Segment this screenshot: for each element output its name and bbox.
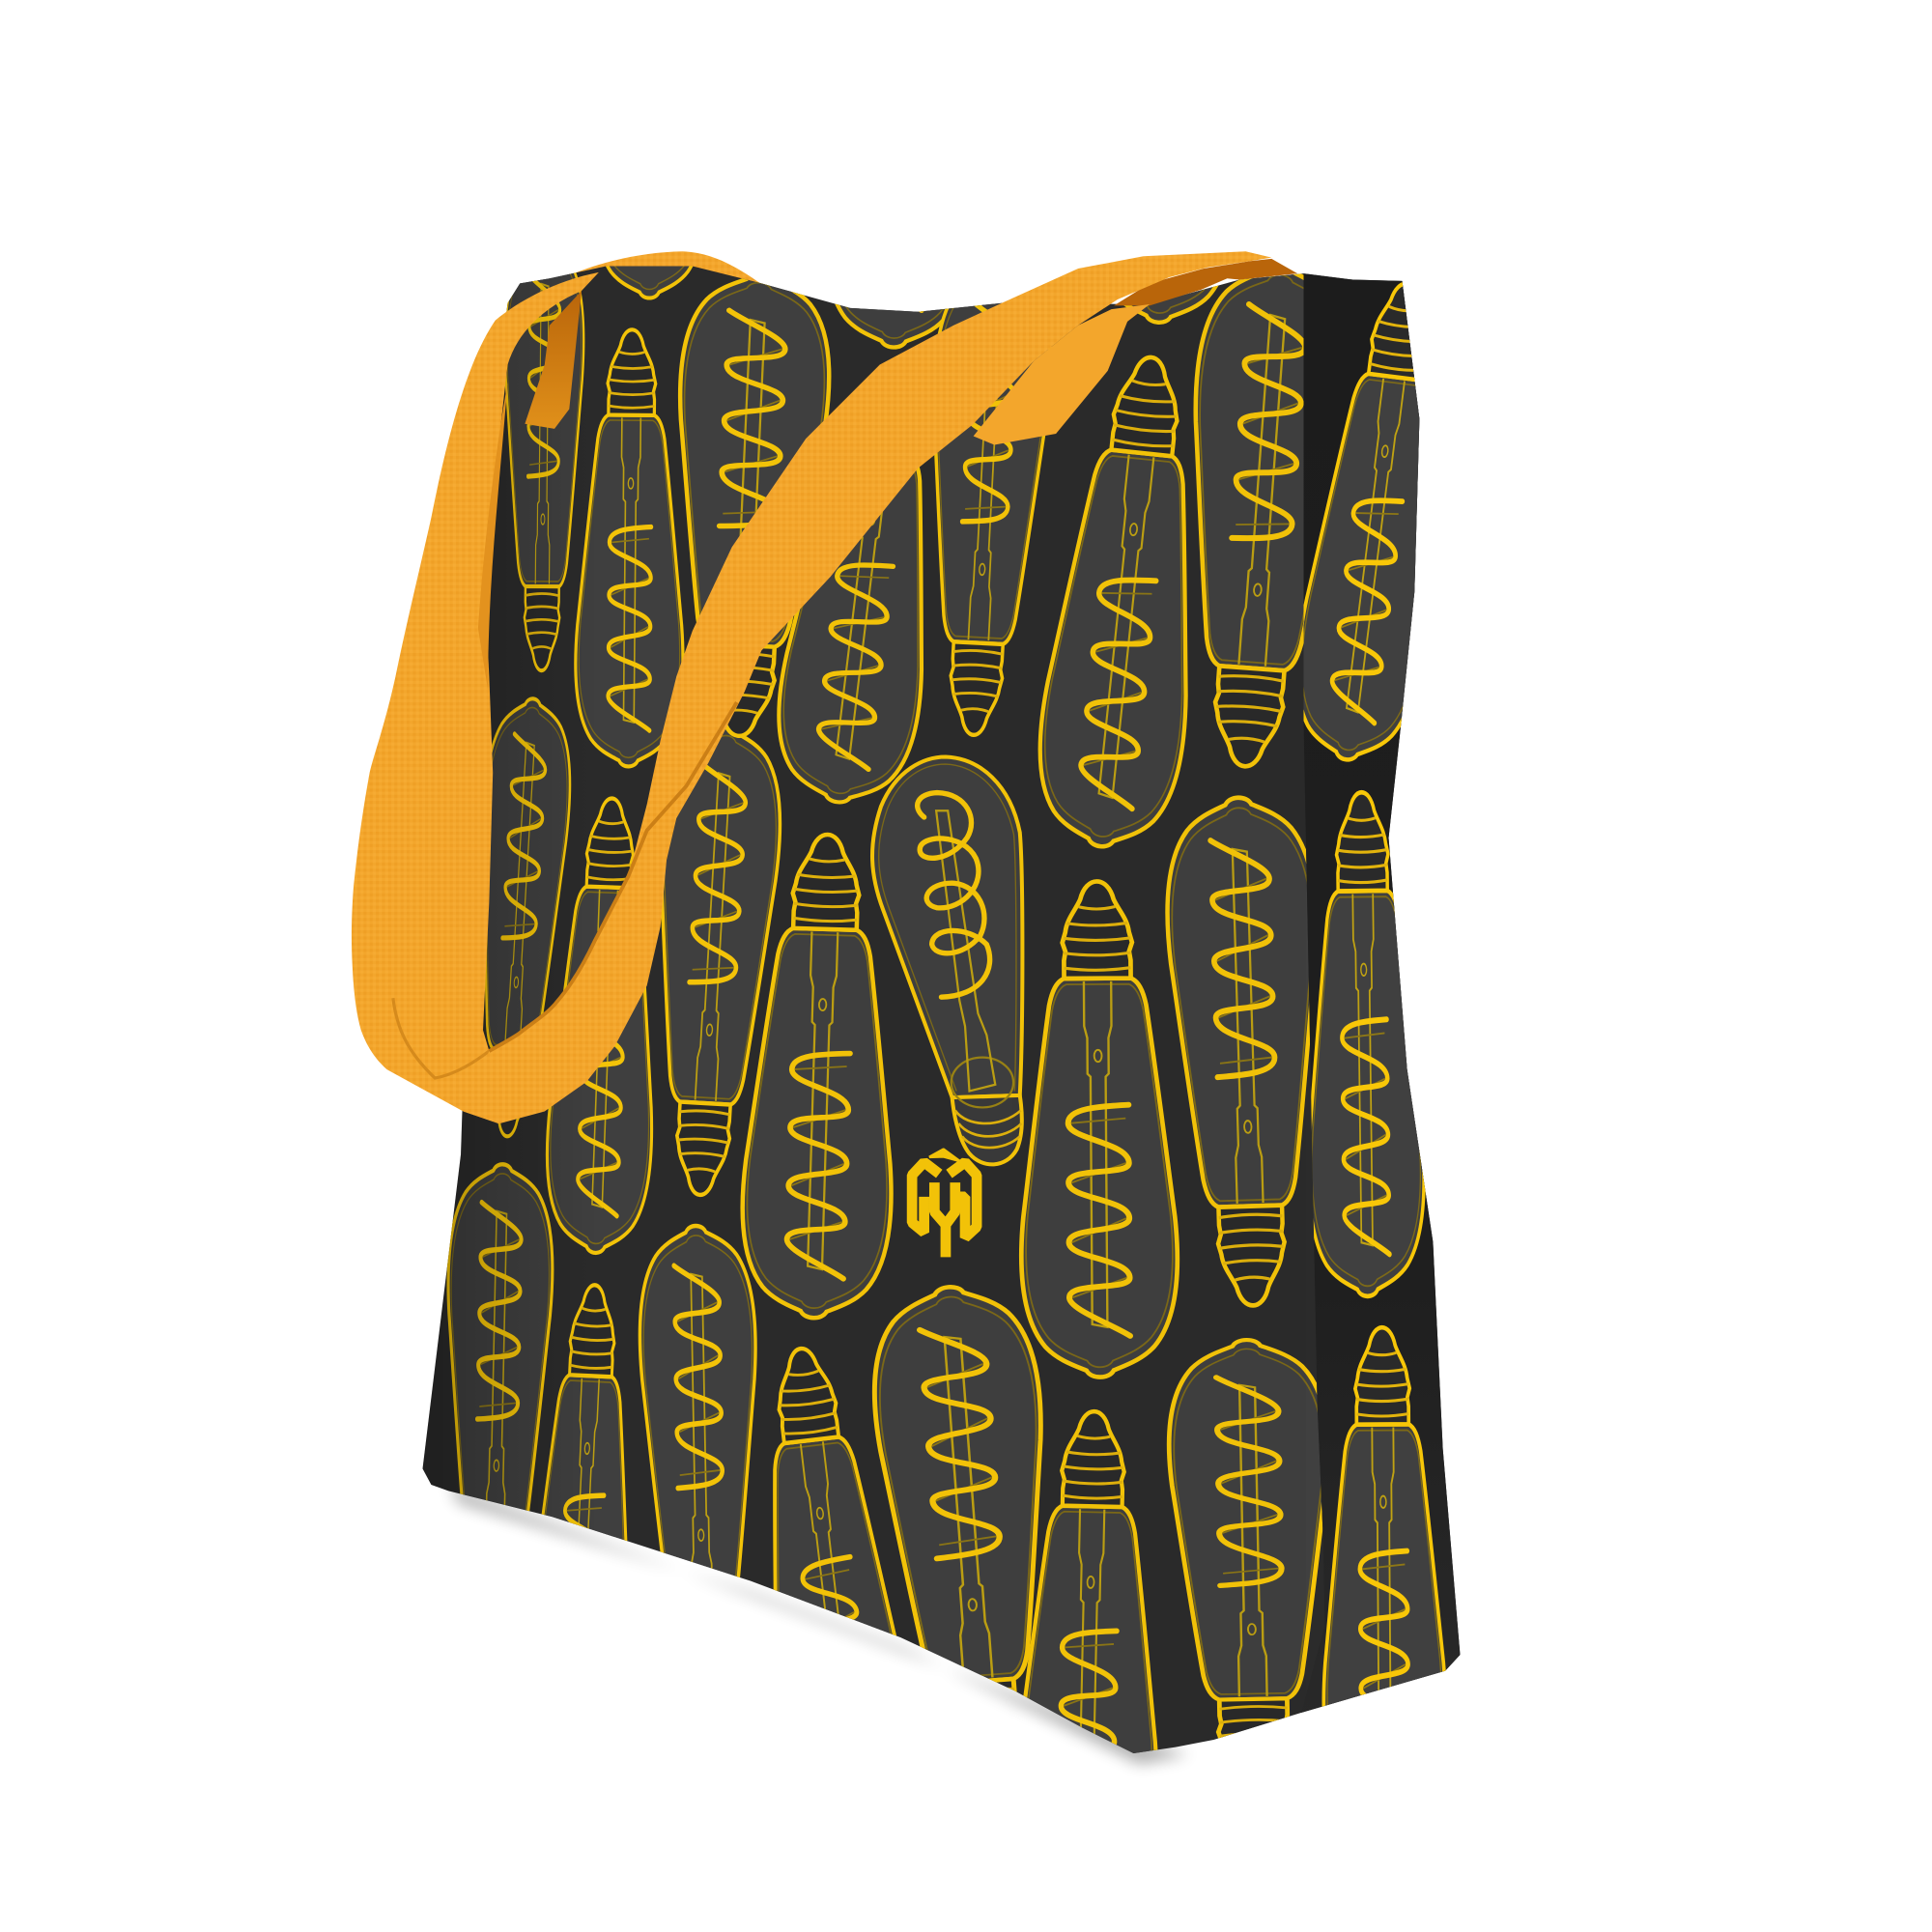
- bulb: [739, 833, 902, 1321]
- strap underside shadow: [1114, 259, 1297, 305]
- bulb: [1304, 282, 1420, 762]
- bulb: [934, 303, 1051, 737]
- bulb: [661, 730, 782, 1198]
- left strap inner fold: [478, 382, 508, 690]
- bulb: [1123, 285, 1219, 325]
- bulb: [1167, 1338, 1323, 1739]
- front panel shading: [423, 272, 587, 1527]
- front strap: [464, 251, 1271, 1123]
- bulb: [1023, 1408, 1157, 1753]
- bulb: [606, 267, 694, 299]
- bag ground shadow: [448, 1485, 1189, 1765]
- bulb: [446, 1162, 554, 1511]
- front panel bulb pattern: [440, 0, 1357, 1898]
- left strap bottom crease: [393, 998, 489, 1078]
- left strap loop: [352, 272, 599, 1123]
- tilted bulb with curly filament: [872, 756, 1022, 1164]
- side panel bulb pattern: [1301, 273, 1461, 1713]
- bulb: [1165, 795, 1310, 1308]
- side panel darker base: [1301, 273, 1461, 1713]
- bulb: [1304, 792, 1426, 1297]
- bulb: [545, 796, 653, 1256]
- front strap crease: [489, 702, 737, 1051]
- bulb: [1194, 273, 1304, 769]
- bulb: [505, 272, 585, 672]
- inner strap tab: [525, 291, 582, 429]
- brand logo: [912, 1150, 977, 1257]
- strap tab right: [974, 304, 1150, 444]
- bulb: [1019, 881, 1179, 1378]
- bulb: [485, 696, 572, 1138]
- back strap arc behind bag: [496, 251, 764, 323]
- bulb: [541, 1283, 628, 1542]
- bulb: [835, 303, 954, 350]
- bulb: [773, 1347, 896, 1636]
- bulb: [1037, 355, 1188, 848]
- bag body: [423, 267, 1460, 1753]
- bulb: [777, 468, 923, 804]
- bulb: [638, 1223, 757, 1577]
- tote bag product illustration: [352, 251, 1461, 1772]
- bulb: [678, 278, 831, 738]
- bulb: [1321, 1325, 1446, 1707]
- bulb: [871, 1285, 1043, 1692]
- bulb: [575, 329, 686, 767]
